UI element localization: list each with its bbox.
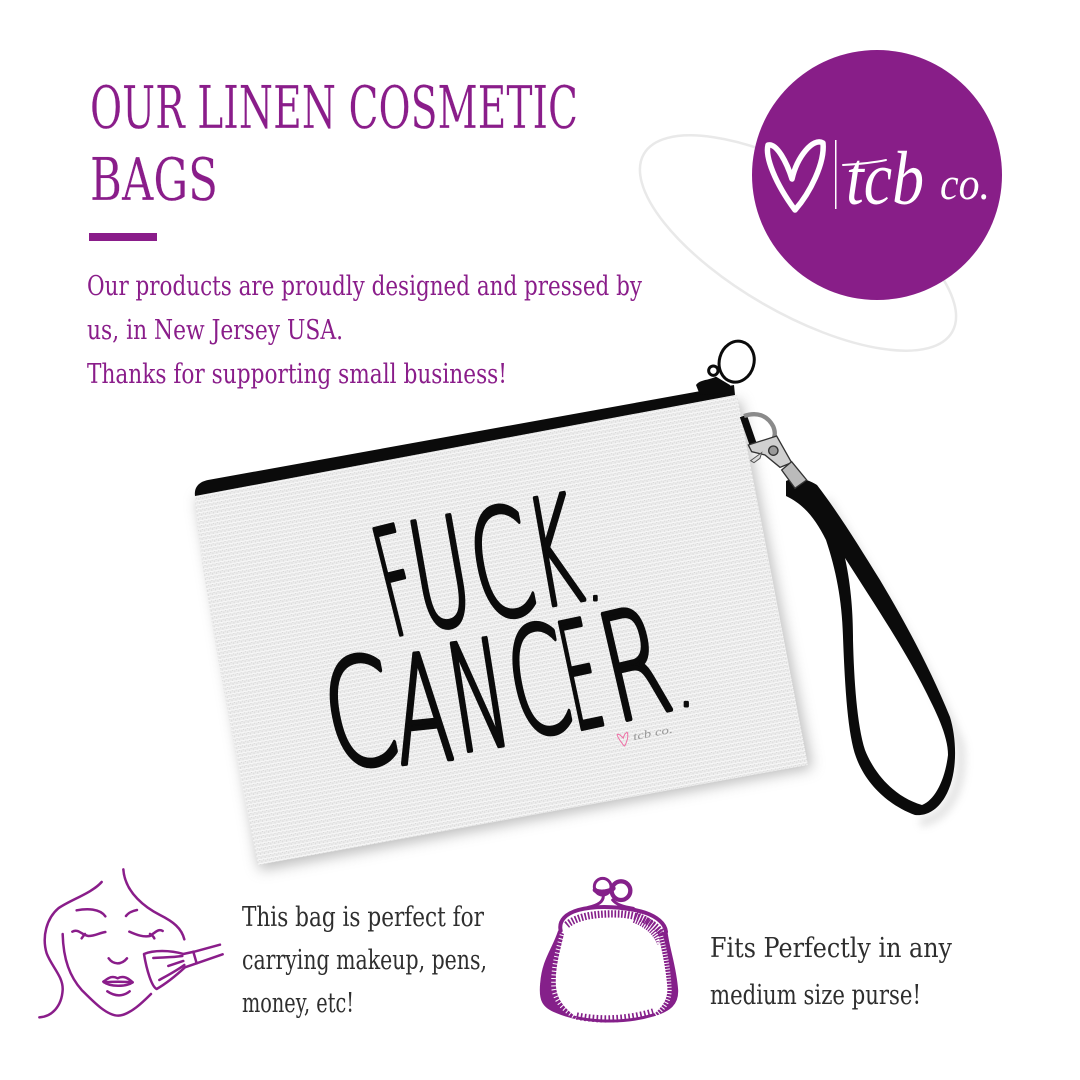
zipper pull and ring: [696, 337, 759, 395]
bag print: CANCER.: C: [494, 594, 584, 773]
bag print: CANCER.: C: [310, 624, 410, 806]
intro text block: us, in New Jersey USA.: [87, 315, 343, 346]
product: linen bag: [195, 337, 961, 870]
strap soft shadow: [826, 500, 961, 822]
bag shadow: [197, 400, 812, 870]
logo wordmark: co.: [940, 158, 990, 209]
bag print: CANCER.: E: [547, 590, 615, 765]
bag print: FUCK.: [360, 465, 603, 671]
icon: face with makeup brush: [39, 869, 223, 1017]
lobster clasp: [743, 414, 807, 488]
bag print: FUCK.: K: [517, 465, 592, 642]
logo badge: tcb co.: [752, 50, 1002, 300]
caption: purse fit: Fits Perfectly in any: [710, 933, 953, 964]
bag print: FUCK.: C: [456, 475, 548, 656]
bag print: CANCER.: A: [386, 623, 459, 800]
wrist strap: [786, 478, 955, 815]
bag print: small logo: [617, 724, 674, 747]
caption: makeup: [242, 902, 487, 1019]
intro text block: [87, 271, 643, 390]
title: OUR LINEN COSMETIC: [90, 73, 578, 142]
title underline bar: [89, 233, 157, 241]
bag print: CANCER.: .: [678, 653, 695, 721]
bag print: FUCK.: .: [588, 547, 603, 614]
caption: makeup: This bag is perfect for: [242, 902, 484, 933]
title: BAGS: [90, 145, 218, 214]
intro text block: Our products are proudly designed and pressed by: [87, 271, 643, 302]
caption: makeup: money, etc!: [242, 988, 354, 1019]
icon: coin purse: [541, 878, 677, 1021]
bag print: FUCK.: U: [398, 486, 484, 665]
logo wordmark: tcb: [846, 137, 924, 221]
bag print: CANCER.: [310, 575, 695, 806]
decorative orbit ellipse: [609, 93, 987, 393]
bag print: small logo: tcb co.: [632, 724, 674, 743]
bag print: CANCER.: N: [438, 608, 520, 787]
icon: heart: [767, 142, 823, 210]
bag body: [195, 395, 808, 865]
intro text block: Thanks for supporting small business!: [87, 359, 507, 390]
logo wordmark: [843, 137, 990, 221]
caption: purse fit: medium size purse!: [710, 980, 921, 1011]
zipper band: [195, 385, 735, 496]
title: [90, 73, 578, 214]
bag print: CANCER.: R: [585, 575, 684, 756]
logo divider: [835, 140, 836, 209]
bag print: FUCK.: F: [360, 496, 433, 671]
caption: makeup: carrying makeup, pens,: [242, 945, 487, 976]
caption: purse fit: [710, 933, 953, 1011]
